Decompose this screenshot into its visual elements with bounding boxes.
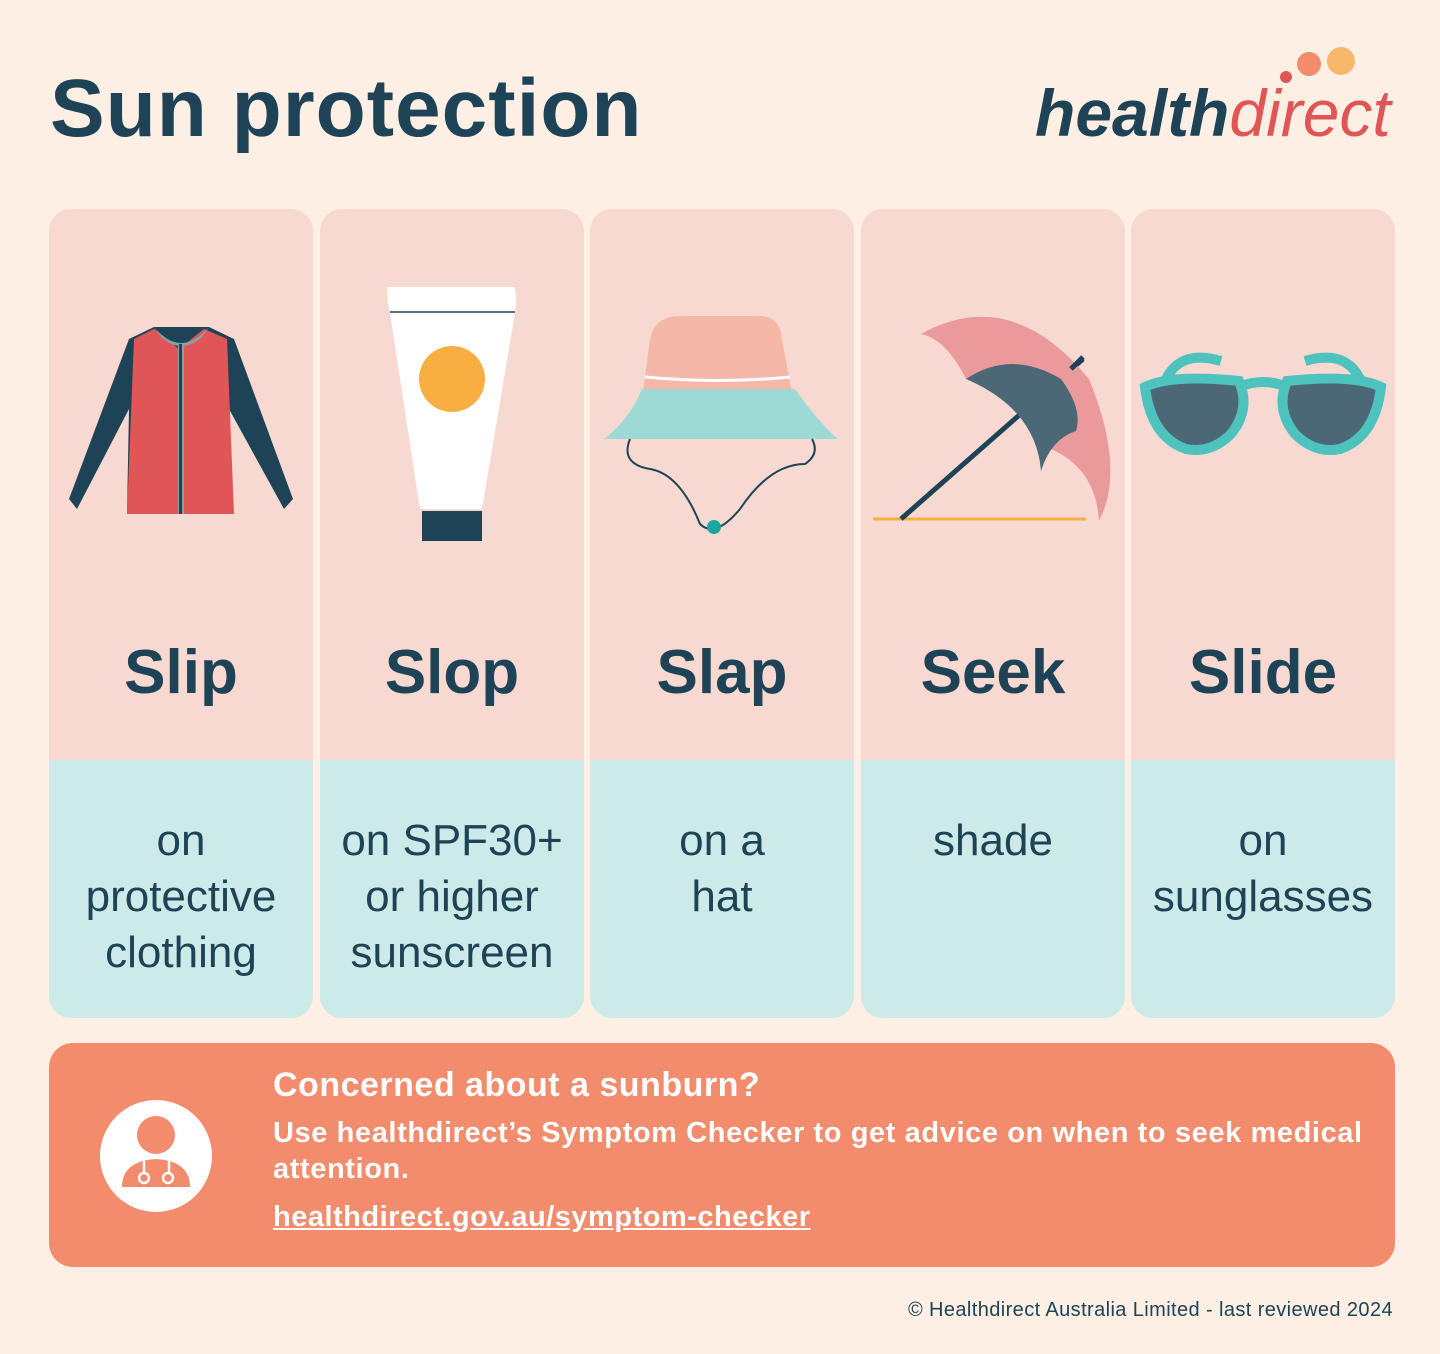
panel: seek: shade: [933, 816, 1053, 865]
panel: slop: on SPF30+: [341, 816, 563, 865]
panel: slop: [320, 209, 584, 1018]
panel: slip: [49, 209, 313, 1018]
panel: seek: [861, 209, 1125, 1018]
icon: jacket: [69, 327, 293, 514]
callout: symptom checker: [49, 1043, 1395, 1267]
panel: slide: on: [1239, 816, 1287, 865]
icon: sunglasses: [1140, 352, 1386, 455]
callout text: healthdirect.gov.au/symptom-checker: [273, 1201, 811, 1233]
panel: slap: hat: [691, 872, 753, 921]
footer: © Healthdirect Australia Limited - last reviewed 2024: [908, 1299, 1393, 1321]
panel: slide: Slide: [1189, 638, 1337, 707]
logo: healthdirect: [1035, 76, 1391, 150]
callout text: Concerned about a sunburn?: [273, 1066, 760, 1104]
panel: slide: [1131, 209, 1395, 1018]
panel: slip: clothing: [105, 928, 257, 977]
panel: slip: on: [157, 816, 205, 865]
icon: doctor: [100, 1100, 212, 1212]
panel: slide: sunglasses: [1153, 872, 1373, 921]
panel: slop: sunscreen: [350, 928, 554, 977]
icon: hat: [604, 316, 838, 534]
callout text: Use healthdirect’s Symptom Checker to get advice on when to seek medical attention.: [273, 1117, 1363, 1185]
panel: slip: Slip: [124, 638, 238, 707]
panel: slip: protective: [86, 872, 276, 921]
panel: slap: on a: [679, 816, 765, 865]
title: Sun protection: [50, 63, 643, 154]
panel: seek: Seek: [921, 638, 1065, 707]
icon: umbrella: [873, 316, 1110, 521]
callout text: [273, 1066, 1363, 1233]
panel: slap: [590, 209, 854, 1018]
icon: sunscreen: [387, 287, 516, 541]
panel: slop: Slop: [385, 638, 519, 707]
panel: slap: Slap: [657, 638, 787, 707]
panel: slop: or higher: [365, 872, 539, 921]
